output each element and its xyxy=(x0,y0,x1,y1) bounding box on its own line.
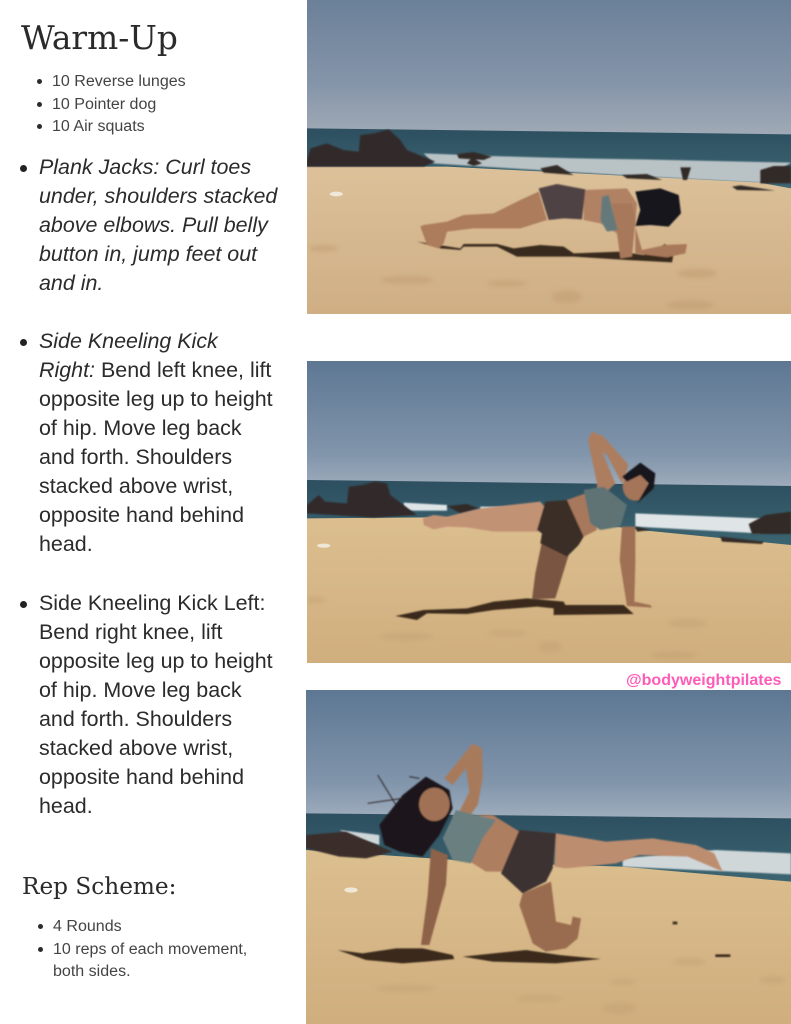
text block: plank jacks: button in, jump feet out xyxy=(39,242,257,266)
hair xyxy=(379,777,453,857)
rep scheme list xyxy=(38,917,247,980)
text block: side kneeling kick right: head. xyxy=(39,532,93,556)
photos xyxy=(306,0,791,1024)
hair xyxy=(622,463,655,503)
kneeling figure facing left xyxy=(338,743,723,963)
raised leg xyxy=(554,833,723,872)
text block: side kneeling kick right xyxy=(21,327,273,559)
support arm xyxy=(620,527,652,608)
text block: side kneeling kick left: and forth. Shoulders xyxy=(39,707,232,731)
text block: plank jacks xyxy=(21,153,277,298)
text block: side kneeling kick right: of hip. Move leg back xyxy=(39,416,242,440)
text block: side kneeling kick left: opposite hand behind xyxy=(39,765,244,789)
hair xyxy=(635,188,681,227)
text block: plank jacks: and in. xyxy=(39,271,103,295)
warm-up list xyxy=(37,72,186,135)
text block: side kneeling kick right: Right: Bend left knee, lift xyxy=(39,358,271,382)
top xyxy=(584,487,627,530)
raised arm xyxy=(588,432,629,492)
text block: side kneeling kick left xyxy=(21,589,273,821)
shadow xyxy=(338,948,601,963)
text block: plank jacks: under, shoulders stacked xyxy=(39,184,277,208)
text block: plank jacks: Plank Jacks: Curl toes xyxy=(39,155,251,179)
text block: side kneeling kick left: head. xyxy=(39,794,93,818)
text block: side kneeling kick right: opposite leg up to height xyxy=(39,387,273,411)
text block: side kneeling kick left: stacked above wrist, xyxy=(39,736,233,760)
support arm xyxy=(421,848,448,945)
shorts xyxy=(537,500,584,557)
text block: side kneeling kick right: Side Kneeling Kick xyxy=(39,329,218,353)
warm-up list: 10 Pointer dog xyxy=(52,94,156,112)
photo 1: plank on beach xyxy=(307,0,791,314)
raised arm xyxy=(444,743,483,817)
text block: side kneeling kick left: of hip. Move leg back xyxy=(39,678,242,702)
face xyxy=(419,788,450,821)
handle: @bodyweightpilates: @bodyweightpilates xyxy=(626,671,781,689)
torso xyxy=(453,815,519,872)
rep scheme list: 10 reps of each movement, xyxy=(53,940,247,958)
text block: side kneeling kick left: Bend right knee, lift xyxy=(39,620,223,644)
shorts xyxy=(539,184,585,220)
shadow xyxy=(395,598,634,620)
text block: side kneeling kick left: Side Kneeling Kick Left: xyxy=(39,591,265,615)
shadow xyxy=(417,242,674,262)
heading: rep scheme: Rep Scheme: xyxy=(22,873,176,900)
rep scheme list: both sides. xyxy=(53,962,131,980)
raised leg xyxy=(423,502,547,532)
text block: plank jacks: above elbows. Pull belly xyxy=(39,213,268,237)
kneeling leg xyxy=(519,882,581,952)
photo 3: side kneeling kick left xyxy=(306,690,791,1024)
warm-up list: 10 Reverse lunges xyxy=(52,72,186,90)
title: Warm-Up: Warm-Up xyxy=(21,19,178,57)
legs xyxy=(420,192,547,248)
text block: side kneeling kick right: and forth. Shoulders xyxy=(39,445,232,469)
arms xyxy=(612,203,687,258)
top xyxy=(443,810,496,863)
torso xyxy=(584,188,637,233)
kneeling figure facing viewer xyxy=(395,432,655,620)
text block: side kneeling kick left: opposite leg up to height xyxy=(39,649,273,673)
hair wisps xyxy=(368,775,419,805)
thigh xyxy=(532,542,569,599)
text block: side kneeling kick right: stacked above wrist, xyxy=(39,474,233,498)
photo 2: side kneeling kick right xyxy=(305,361,791,663)
text block: side kneeling kick right: opposite hand behind xyxy=(39,503,244,527)
bra xyxy=(600,195,618,232)
rep scheme list: 4 Rounds xyxy=(53,917,122,935)
warm-up list: 10 Air squats xyxy=(52,117,145,135)
shorts xyxy=(501,830,556,893)
face xyxy=(623,473,648,501)
plank figure xyxy=(417,184,687,262)
torso xyxy=(567,493,597,538)
